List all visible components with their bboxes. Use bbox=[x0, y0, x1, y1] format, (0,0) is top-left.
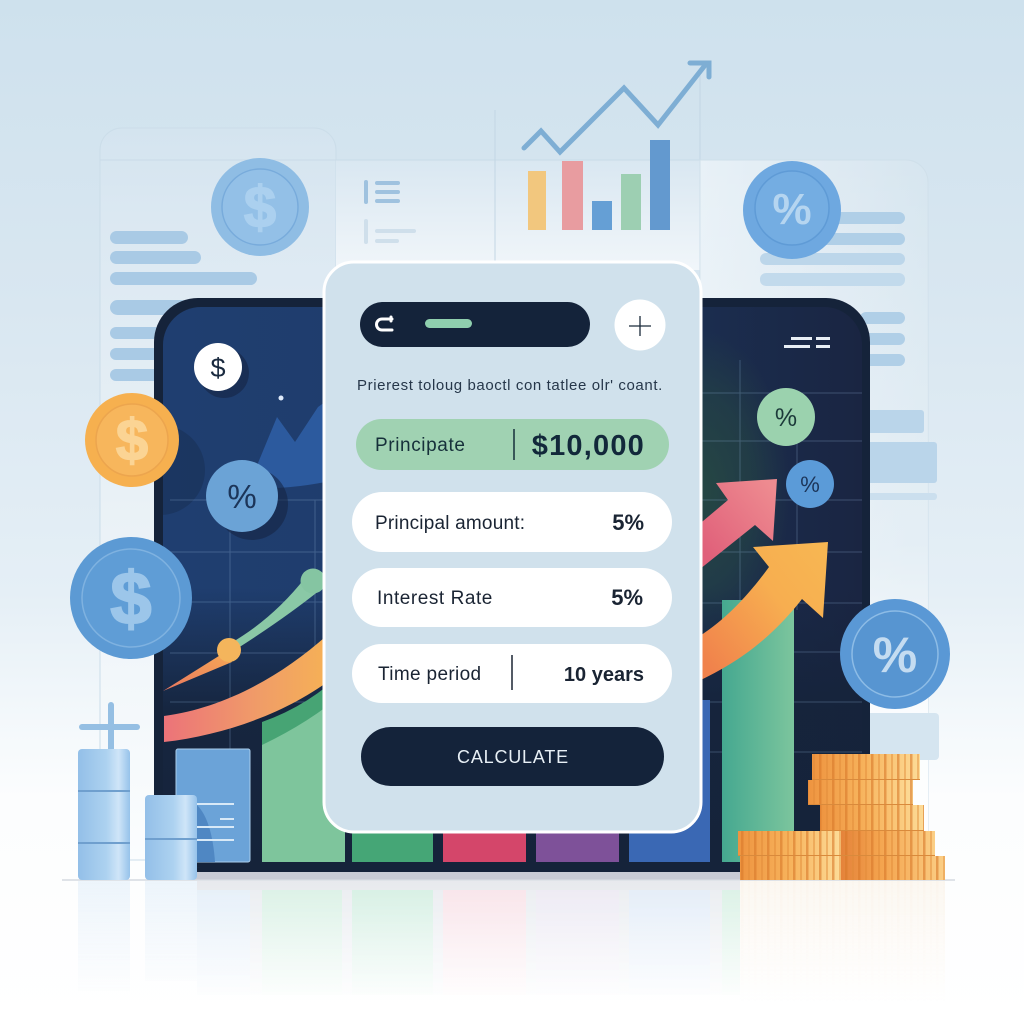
floor line bbox=[62, 879, 955, 881]
icon: green percent coin: % bbox=[775, 404, 797, 432]
row: time period: Time period bbox=[378, 664, 481, 685]
chart bars bbox=[176, 600, 794, 862]
icon: plus button bbox=[614, 300, 666, 350]
icon: blue percent coin on screen bbox=[206, 460, 288, 540]
row: principate: $10,000 bbox=[532, 430, 645, 462]
background panel: right sheet bbox=[700, 160, 939, 860]
icon: tablet menu dashes bbox=[784, 337, 830, 348]
icon: green percent coin bbox=[757, 388, 815, 446]
icon: white dollar coin bbox=[194, 343, 249, 398]
row: time period: 10 years bbox=[564, 664, 644, 686]
description text: Prierest toloug baoctl con tatlee olr' coant. bbox=[357, 377, 663, 394]
icon: blue percent coin on screen: % bbox=[227, 478, 257, 515]
row: interest rate: Interest Rate bbox=[377, 588, 493, 609]
cylinder stack: tall bbox=[78, 749, 130, 880]
row: principate: Principate bbox=[375, 435, 466, 456]
icon: small blue percent coin bbox=[786, 460, 834, 508]
area chart: mountain bbox=[258, 404, 322, 488]
icon: top dollar coin: $ bbox=[244, 175, 276, 240]
text lines: right sheet bbox=[760, 212, 939, 760]
icon: top percent coin bbox=[743, 161, 841, 259]
floor reflection bbox=[78, 881, 945, 978]
icon: plus sign bbox=[79, 702, 140, 752]
spear: growth line bbox=[163, 654, 232, 691]
icon: large percent coin: % bbox=[873, 627, 917, 683]
star sparkle bbox=[278, 396, 284, 400]
coin stack bbox=[738, 754, 945, 880]
icon: large percent coin bbox=[840, 599, 950, 709]
icon: top dollar coin bbox=[211, 158, 309, 256]
screen content bbox=[163, 360, 862, 868]
bar chart: top bbox=[528, 140, 670, 230]
icon: white dollar coin: $ bbox=[210, 353, 226, 383]
icon: small blue percent coin: % bbox=[800, 472, 820, 497]
arrow: rising trend line bbox=[524, 63, 709, 152]
background panel: middle sheet bbox=[336, 70, 760, 270]
icon: gold dollar coin: $ bbox=[116, 408, 148, 473]
icon: large blue dollar coin: $ bbox=[110, 557, 152, 640]
background panel: left sheet bbox=[100, 128, 336, 860]
cylinder stack: short bbox=[145, 795, 197, 880]
top bar bbox=[360, 302, 590, 347]
arrow: pink bbox=[702, 479, 777, 567]
ribbon: left growth curve bbox=[164, 639, 322, 742]
icon: large blue dollar coin bbox=[70, 537, 192, 659]
arrow: orange bbox=[702, 542, 828, 679]
row: time period bbox=[352, 644, 672, 703]
button: calculate bbox=[361, 727, 664, 786]
row: interest rate bbox=[352, 568, 672, 627]
calculator card bbox=[324, 262, 701, 832]
icon: gold dollar coin bbox=[85, 393, 179, 487]
row: interest rate: 5% bbox=[611, 585, 643, 610]
icon: list glyphs bbox=[364, 180, 416, 244]
row: principal amount: 5% bbox=[612, 510, 644, 535]
text lines: left sheet bbox=[110, 231, 257, 381]
row: principal amount: Principal amount: bbox=[375, 513, 525, 534]
row: principal amount bbox=[352, 492, 672, 552]
tablet bbox=[115, 298, 870, 880]
icon: top percent coin: % bbox=[772, 185, 812, 234]
row: principate bbox=[356, 419, 669, 470]
button: calculate: CALCULATE bbox=[457, 747, 569, 767]
grid lines bbox=[170, 360, 862, 760]
